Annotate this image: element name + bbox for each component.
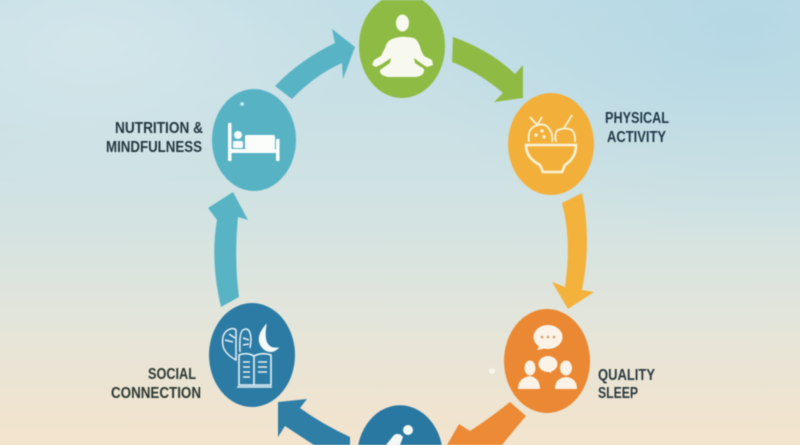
label: quality sleep (598, 367, 656, 402)
icon: bed (228, 123, 280, 161)
label: physical activity: ACTIVITY (607, 129, 667, 146)
arrow: orange, people to figure (447, 402, 526, 445)
label: physical activity: PHYSICAL (605, 110, 669, 127)
icon: crescent moon (259, 325, 278, 352)
label: quality sleep: QUALITY (598, 367, 656, 384)
node: people talking (504, 309, 590, 413)
node: brain, moon and book (209, 303, 295, 407)
arrow: blue, figure to brain and book (278, 399, 350, 445)
node: nutrition bowl (508, 93, 594, 195)
label: quality sleep: SLEEP (598, 385, 638, 402)
icon: meditating person (372, 14, 433, 77)
arrow: yellow, bowl to people (552, 193, 594, 309)
icon: moving figure (386, 425, 413, 445)
speech bubble dots (541, 336, 555, 338)
arrow: teal, lower left going up (208, 192, 248, 307)
label: nutrition and mindfulness: MINDFULNESS (106, 139, 202, 156)
label: social connection: SOCIAL (148, 366, 196, 383)
label: nutrition and mindfulness (106, 120, 203, 156)
sparkle near people node (489, 368, 495, 374)
label: social connection (111, 366, 201, 402)
label: social connection: CONNECTION (111, 385, 201, 402)
icon: fruit bowl (526, 115, 576, 172)
arrow: green, meditation to bowl (452, 37, 523, 102)
label: physical activity (605, 110, 669, 146)
label: nutrition and mindfulness: NUTRITION & (115, 120, 203, 137)
icon: people with speech bubbles (518, 325, 577, 389)
icon: open book (237, 354, 272, 387)
node: bed (212, 89, 296, 191)
arrow: teal, upper left going to meditation (275, 29, 355, 99)
icon: brain (223, 328, 251, 360)
node: meditation (359, 0, 445, 98)
sparkle on bed node (240, 102, 244, 106)
node: bottom figure (358, 405, 442, 445)
